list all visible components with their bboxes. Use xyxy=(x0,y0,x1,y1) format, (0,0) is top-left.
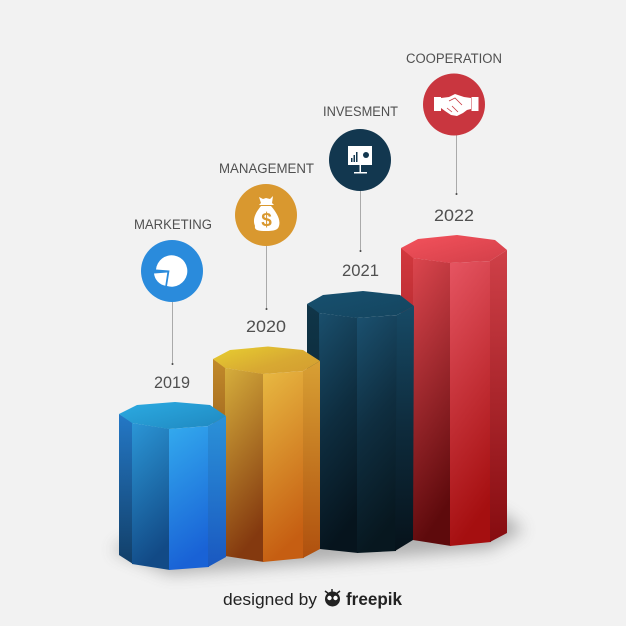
year: 2019: 2019 xyxy=(154,374,190,392)
icon: cooperation handshake xyxy=(423,74,485,136)
year: 2020: 2020 xyxy=(246,318,286,336)
label: management: MANAGEMENT xyxy=(219,161,314,176)
footer: designed by freepik: freepik xyxy=(346,589,402,609)
footer: designed by freepik: designed by xyxy=(223,590,318,609)
bar: 2020 gold xyxy=(213,346,320,562)
icon: management money bag: $ xyxy=(261,210,272,231)
connector lines xyxy=(172,134,458,365)
icon: marketing pie chart xyxy=(141,240,203,302)
bar: 2019 blue xyxy=(119,402,226,570)
year: 2021: 2021 xyxy=(342,262,379,280)
label: investment: INVESMENT xyxy=(323,104,398,119)
label: marketing: MARKETING xyxy=(134,217,212,232)
bar: 2021 navy xyxy=(307,291,414,553)
label: cooperation: COOPERATION xyxy=(406,51,502,66)
icon: management money bag xyxy=(235,184,297,246)
footer: designed by freepik xyxy=(223,589,402,609)
year: 2022: 2022 xyxy=(434,207,474,225)
bar: 2022 red xyxy=(401,235,507,546)
floor shadow xyxy=(112,512,524,574)
icon: investment presentation board xyxy=(329,129,391,191)
